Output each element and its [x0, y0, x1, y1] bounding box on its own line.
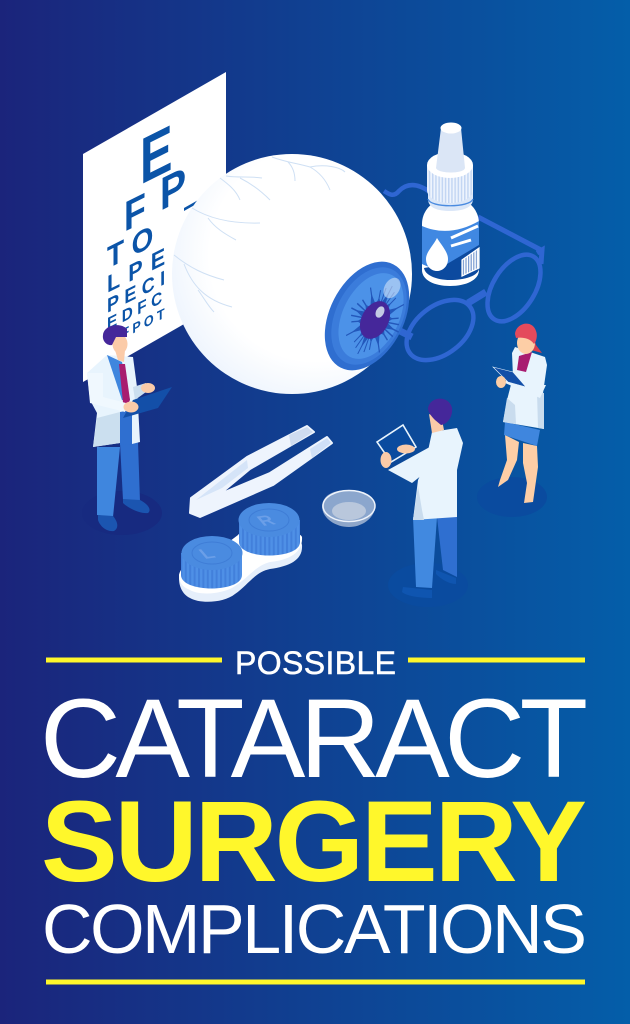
- sleeve: [505, 372, 546, 398]
- hands: [124, 402, 138, 412]
- eye chart: P: [160, 156, 186, 221]
- cap: [427, 165, 473, 203]
- trousers: [120, 442, 140, 502]
- eye chart: EDFC: [107, 285, 167, 334]
- doctor with notebook: [477, 324, 547, 517]
- heading: surgery: SURGERY: [41, 778, 587, 906]
- neck: [115, 350, 125, 362]
- eye drops bottle: [422, 122, 479, 286]
- shoes: [402, 587, 432, 598]
- eye chart: E: [140, 110, 173, 199]
- blouse: [517, 352, 532, 372]
- head and hair: [112, 334, 128, 354]
- tweezers: [190, 426, 332, 517]
- R lid: R: [252, 512, 279, 529]
- hair back: [531, 335, 542, 353]
- highlight: [380, 275, 404, 301]
- case base: [179, 533, 302, 602]
- eye chart: TO: [107, 214, 161, 276]
- eye chart: [83, 72, 226, 382]
- shirt and tie: [107, 355, 130, 400]
- rule: top right: [408, 658, 585, 662]
- glasses: [384, 185, 551, 372]
- eye chart: PECI: [107, 264, 171, 318]
- hands: [380, 452, 392, 468]
- bottle body: [422, 200, 479, 286]
- doctor with clipboard: [82, 325, 172, 535]
- blood vessels: [174, 157, 345, 312]
- eyeball: [172, 154, 426, 394]
- label: [422, 221, 479, 272]
- skirt: [504, 422, 540, 446]
- nozzle: [436, 128, 465, 172]
- clipboard: [123, 387, 172, 418]
- barcode: [462, 248, 479, 276]
- L lid: L: [194, 545, 219, 562]
- eye chart: F: [124, 183, 146, 241]
- iris fibres: [334, 274, 416, 366]
- doctor with tablet: [377, 399, 468, 607]
- drop icon: [426, 238, 448, 271]
- heading: cataract: CATARACT: [40, 676, 588, 801]
- legs: [498, 435, 519, 487]
- lab coat and arm: [413, 428, 463, 520]
- neck and hair: [429, 414, 444, 433]
- pupil: [354, 296, 396, 344]
- heading: possible: POSSIBLE: [235, 645, 396, 681]
- head and hair: [517, 332, 535, 354]
- title block: [40, 645, 588, 984]
- contact lens: [322, 490, 375, 527]
- rule: top left: [46, 658, 222, 662]
- neck: [428, 190, 473, 211]
- sleeves: [133, 383, 146, 400]
- rule: bottom: [46, 980, 585, 984]
- tablet: [377, 425, 416, 462]
- eye chart: LPE: [107, 239, 173, 299]
- notebook: [493, 367, 526, 387]
- hand: [496, 376, 506, 388]
- shoes: [123, 499, 150, 513]
- lab coat: [503, 347, 547, 429]
- eye chart: EFPOT: [110, 303, 168, 348]
- contact lens case: [179, 503, 302, 602]
- trousers: [437, 515, 457, 577]
- heading: complications: COMPLICATIONS: [42, 890, 587, 968]
- iris: [308, 248, 426, 384]
- label lines: [451, 226, 478, 246]
- lab coat: [87, 355, 140, 447]
